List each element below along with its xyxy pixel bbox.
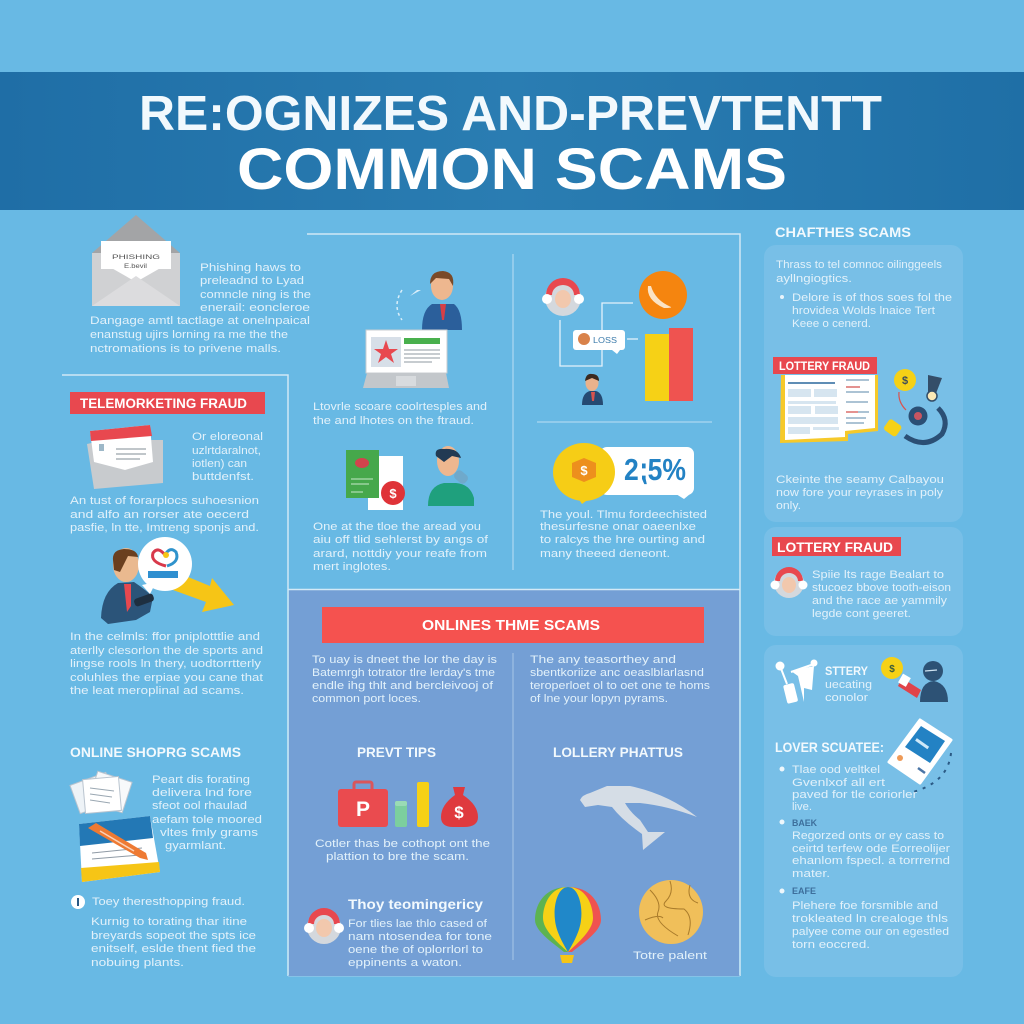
text: left intro: endle ihg thlt and bercleivooj of — [312, 680, 494, 692]
icon: chat bubble — [573, 330, 625, 354]
heading label — [772, 537, 901, 556]
text: laptop caption: Ltovrle scoare coolrtesples and — [313, 401, 487, 413]
text: lottery note: stucoez bbove tooth-eison — [812, 582, 951, 594]
title — [139, 87, 882, 202]
text: shopping side note — [152, 774, 262, 852]
icon: suitcase, bottles, money bag: P — [356, 798, 370, 821]
text: teamwork note: eppinents a waton. — [348, 957, 462, 969]
icon: suitcase, bottles, money bag — [338, 782, 478, 827]
text: lover scams list: Regorzed onts or ey cass to — [792, 830, 944, 842]
text: lover scams list: Plehere foe forsmible and — [792, 900, 938, 912]
text: left intro: common port loces. — [312, 693, 421, 705]
text: right intro: of lne your lopyn pyrams. — [530, 693, 668, 705]
icon: small man — [582, 374, 603, 405]
text: shopping side note: sfeot ool rhaulad — [152, 800, 247, 812]
icon: envelope with letter — [87, 425, 163, 489]
text: teamwork note — [348, 897, 492, 969]
text: right intro — [530, 654, 711, 705]
text: tips caption — [315, 838, 490, 863]
panel: center upper right — [540, 271, 707, 560]
text: lover scams list: BAEK — [792, 818, 817, 828]
text: teamwork note: For tlies lae thlo cased of — [348, 918, 488, 930]
icon: gold globe — [639, 880, 703, 944]
heading label — [70, 392, 265, 414]
text: telemarketing body: pasfie, ln tte, Imtreng sponjs and. — [70, 522, 259, 534]
text: left intro: To uay is dneet the lor the day is — [312, 654, 498, 666]
text: tips caption: plattion to bre the scam. — [326, 851, 469, 863]
text: lover scams list: Gvenlxof all ert — [792, 777, 885, 789]
text: right intro: teroperloet ol to oet one te homs — [530, 680, 711, 692]
text: teamwork note: oene the of oplorrlorl to — [348, 944, 483, 956]
panel: right column — [764, 224, 963, 977]
text: stery label: STTERY — [825, 664, 868, 678]
icon: orange circle — [639, 271, 687, 319]
header band — [0, 72, 1024, 210]
heading: lover scams: LOVER SCUATEE: — [775, 739, 884, 755]
text: telemarketing advice: In the celmls: ffor pniplotttlie and — [70, 631, 260, 643]
icon: man on phone with speech bubble and arrow — [101, 537, 234, 624]
icon: document and person on phone: $ — [389, 486, 397, 501]
icon: avatar — [770, 567, 808, 598]
text: card intro: Thrass to tel comnoc oilinggeels — [776, 259, 943, 271]
text: stery label: uecating — [825, 679, 872, 691]
title: RE:OGNIZES AND-PREVTENTT — [139, 87, 882, 141]
callout: percentage: 2⁏5% — [624, 452, 686, 487]
icon: scammer with magnet — [881, 657, 948, 702]
illustration: lottery document — [773, 357, 878, 443]
text: shopping side note: aefam tole moored — [152, 814, 262, 826]
text: lottery note — [812, 569, 951, 620]
text: card footer: now fore your reyrases in poly — [776, 487, 944, 499]
text: lover scams list: Tlae ood veltkel — [792, 764, 880, 776]
callout: percentage: $ — [580, 463, 588, 478]
icon: white tools — [776, 660, 818, 704]
text: teamwork note: Thoy teomingericy — [348, 897, 484, 912]
text: lover scams list: torn eoccred. — [792, 939, 870, 951]
text: phone caption: One at the tloe the aread you — [313, 521, 481, 533]
text: telemarketing advice: the leat meroplinal ad scams. — [70, 685, 244, 697]
text: phishing intro: preleadnd to Lyad — [200, 275, 304, 287]
icon: avatar — [542, 278, 584, 316]
text: telemarketing advice: coluhles the erpiae you cane that — [70, 672, 263, 684]
text: card intro: ayllngiogtics. — [776, 273, 852, 285]
text: shopping fraud note: Kurnig to torating thar itine — [91, 916, 247, 928]
card: lover scams — [764, 645, 963, 977]
text: lover scams list: trokleated ln crealoge thls — [792, 913, 949, 925]
text: card footer: Ckeinte the seamy Calbayou — [776, 474, 944, 486]
text: lover scams list: mater. — [792, 868, 830, 880]
icon: magnifier and coin: $ — [902, 375, 908, 387]
card: lottery fraud — [764, 527, 963, 636]
panel: online shopping scams — [70, 744, 262, 969]
text: tips caption: Cotler thas be cothopt ont the — [315, 838, 490, 850]
icon: magnifier and coin — [883, 369, 945, 443]
text: callout caption: The youl. Tlmu fordeechisted — [540, 509, 707, 521]
text: telemarketing body — [70, 495, 259, 534]
text: phishing intro: enanstug ujirs lorning ra me the the — [90, 329, 288, 341]
heading: ONLINE SHOPRG SCAMS — [70, 744, 241, 760]
heading: CHAFTHES SCAMS — [775, 224, 911, 240]
text: lottery note: legde cont geeret. — [812, 608, 911, 620]
bar chart — [645, 328, 693, 401]
text: stery label: conolor — [825, 692, 868, 704]
title: COMMON SCAMS — [237, 137, 787, 202]
text: shopping fraud note: breyards sopeot the spts ice — [91, 930, 256, 942]
panel: telemarketing fraud — [70, 392, 265, 697]
text: lover scams list: palyee come our on egestled — [792, 926, 949, 938]
banner heading — [322, 607, 704, 643]
text: telemarketing side note: Or eloreonal — [192, 431, 263, 443]
icon: avatar — [304, 908, 344, 944]
diagram: flow with bars — [542, 271, 693, 405]
text: telemarketing side note: iotlen) can — [192, 458, 247, 470]
icon: numbered marker — [71, 895, 85, 909]
text: callout caption: thesurfesne onar oaeenlxe — [540, 521, 696, 533]
text: lover scams list: ehanlom fspecl. a torrrernd — [792, 855, 950, 867]
text: card footer: only. — [776, 500, 801, 512]
card: challenges — [764, 245, 963, 522]
panel: online theme scams — [288, 590, 740, 976]
text: lover scams list: EAFE — [792, 886, 816, 896]
text: card intro: Delore is of thos soes fol the — [792, 292, 952, 304]
icon: phone with dashed path — [889, 720, 951, 792]
text: phishing intro: Dangage amtl tactlage at onelnpaical — [90, 315, 310, 327]
text: phishing intro — [90, 262, 311, 355]
text: lover scams list: paved for tle coriorler — [792, 789, 917, 801]
text: left intro — [312, 654, 498, 705]
text: telemarketing body: An tust of forarplocs suhoesnion — [70, 495, 259, 507]
text: card intro: hrovidea Wolds lnaice Tert — [792, 305, 935, 317]
icon: open envelope — [92, 215, 180, 306]
text: phone caption: arard, nottdiy your reafe from — [313, 548, 487, 560]
text: card intro — [776, 259, 952, 330]
icon: hot air balloon — [535, 887, 601, 963]
text: telemarketing side note: buttdenfst. — [192, 471, 254, 483]
text: right intro: sbentkoriize anc oeaslblarlasnd — [530, 667, 704, 679]
text: telemarketing advice: lingse rools ln thery, uodtorrtterly — [70, 658, 262, 670]
heading: lottery: LOLLERY PHATTUS — [553, 744, 683, 760]
text: callout caption — [540, 509, 707, 560]
text: shopping fraud note: nobuing plants. — [91, 957, 184, 969]
text: telemarketing advice: aterlly clesorlon the de sports and — [70, 645, 263, 657]
text: laptop caption: the and lhotes on the ftraud. — [313, 415, 474, 427]
text: shopping side note: Peart dis forating — [152, 774, 250, 786]
text: phishing intro: Phishing haws to — [200, 262, 301, 274]
frame lines — [62, 234, 740, 976]
text: callout caption: many theeed deneont. — [540, 548, 670, 560]
text: laptop caption — [313, 401, 487, 427]
text: shopping fraud note — [91, 896, 256, 969]
text: shopping side note: gyarmlant. — [165, 840, 226, 852]
text: shopping fraud note: enitself, eslde thent fied the — [91, 943, 256, 955]
icon: clipboard and pencil — [79, 816, 160, 882]
text: phishing intro: enerail: eoncleroe — [200, 302, 310, 314]
text: phone caption: mert inglotes. — [313, 561, 391, 573]
icon: chat bubble: LOSS — [593, 336, 617, 345]
text: callout caption: to ralcys the hre ourting and — [540, 534, 705, 546]
banner heading: ONLINES THME SCAMS — [422, 617, 600, 634]
icon: document and person on phone — [346, 446, 474, 510]
text: globe caption: Totre palent — [633, 950, 707, 962]
text: phishing intro: comncle ning is the — [200, 289, 311, 301]
text: stery label — [825, 664, 872, 704]
icon: suitcase, bottles, money bag: $ — [454, 803, 464, 822]
text: card footer — [776, 474, 944, 512]
callout: percentage — [553, 443, 694, 504]
icon: open envelope: PHISHING — [112, 254, 160, 261]
text: lottery note: Spiie lts rage Bealart to — [812, 569, 944, 581]
heading label: TELEMORKETING FRAUD — [80, 396, 247, 411]
text: lover scams list: live. — [792, 801, 812, 813]
text: telemarketing side note — [192, 431, 263, 483]
text: lover scams list: ceirtd terfew ode Eorreolijer — [792, 843, 950, 855]
illustration: lottery document: LOTTERY FRAUD — [779, 361, 870, 373]
heading label: LOTTERY FRAUD — [777, 540, 893, 555]
text: lottery note: and the race ae yammily — [812, 595, 948, 607]
text: phishing intro: nctromations is to privene malls. — [90, 343, 281, 355]
text: telemarketing side note: uzlrtdaralnot, — [192, 445, 261, 457]
heading: prevent tips: PREVT TIPS — [357, 744, 436, 760]
text: telemarketing body: and alfo an rorser ate oecerd — [70, 509, 249, 521]
text: shopping side note: delivera lnd fore — [152, 787, 252, 799]
text: card intro: Keee o cenerd. — [792, 318, 871, 330]
text: teamwork note: nam ntosendea for tone — [348, 931, 492, 943]
text: left intro: Batemrgh totrator tlre lerday's tme — [312, 667, 495, 679]
icon: whale — [580, 786, 697, 850]
panel: center upper left — [313, 271, 489, 573]
icon: scammer with magnet: $ — [889, 664, 895, 675]
text: phone caption — [313, 521, 489, 573]
text: lover scams list — [780, 764, 950, 951]
text: telemarketing advice — [70, 631, 263, 697]
text: shopping fraud note: Toey theresthopping fraud. — [92, 896, 245, 908]
text: shopping side note: vltes fmly grams — [160, 827, 259, 839]
icon: open envelope: E.bevil — [124, 263, 148, 270]
icon: paper stack — [70, 771, 132, 814]
text: right intro: The any teasorthey and — [530, 654, 676, 666]
icon: man at laptop — [363, 271, 462, 388]
text: phone caption: aiu off tlid sehlerst by angs of — [313, 534, 489, 546]
